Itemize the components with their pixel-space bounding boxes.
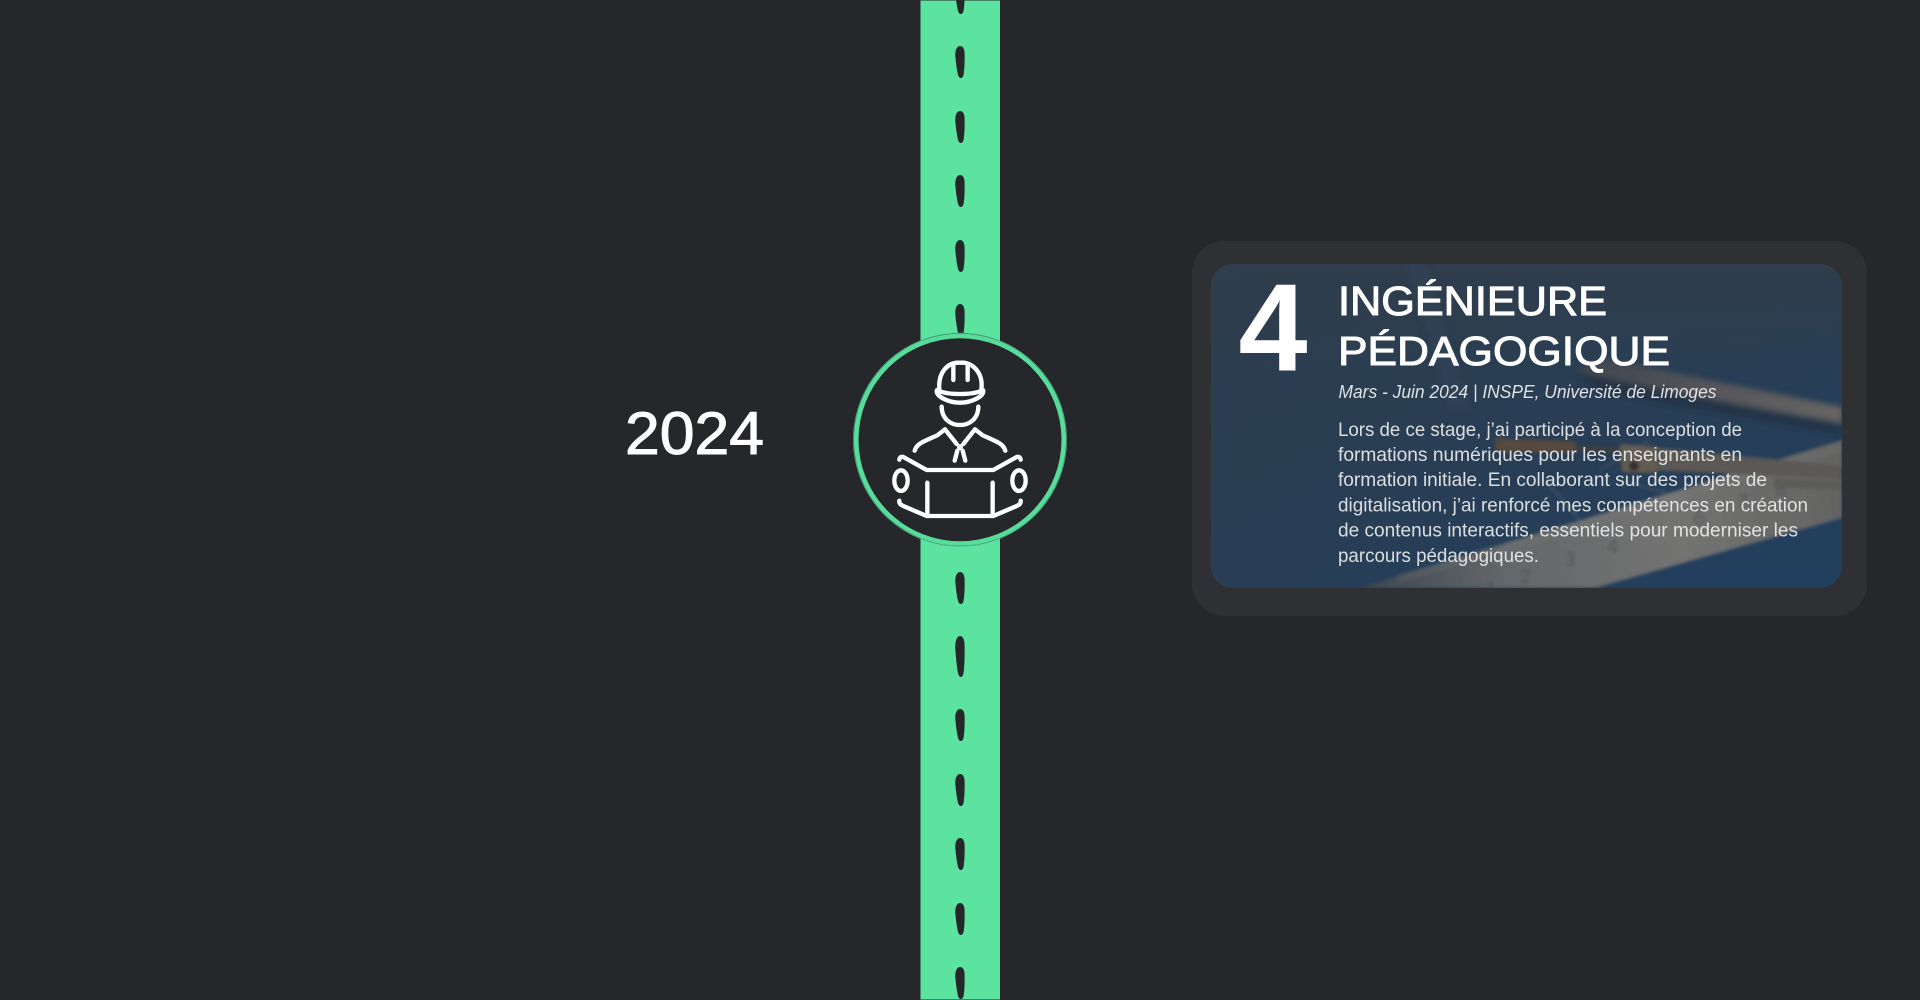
card background photo: compass and ruler: 3 xyxy=(1564,549,1575,571)
description: Lors de ce stage, j’ai participé à la conception de xyxy=(1338,420,1742,441)
heading: INGÉNIEURE xyxy=(1338,278,1607,324)
card background photo: compass and ruler: 1 xyxy=(1486,578,1497,600)
shoulders and collar xyxy=(915,429,1005,461)
card background photo: compass and ruler: 8 xyxy=(1775,479,1786,501)
card background photo: compass and ruler: 4 xyxy=(1607,536,1618,558)
milestone circle xyxy=(853,333,1067,546)
year label: 2024 xyxy=(625,400,764,467)
card background photo: compass and ruler: 6 xyxy=(1694,508,1705,530)
description xyxy=(1338,420,1808,567)
helmet xyxy=(937,363,983,403)
description: parcours pédagogiques. xyxy=(1338,546,1539,567)
hands xyxy=(894,470,1026,491)
card background photo: compass and ruler xyxy=(1211,262,1842,600)
face xyxy=(942,407,978,425)
description: formation initiale. En collaborant sur des projets de xyxy=(1338,470,1767,491)
icon: engineer with helmet reading a plan xyxy=(894,363,1026,516)
heading xyxy=(1338,278,1670,374)
compass arm with brass barrel xyxy=(1495,438,1575,453)
description: digitalisation, j’ai renforcé mes compétences en création xyxy=(1338,496,1808,516)
description: formations numériques pour les enseignants en xyxy=(1338,445,1742,466)
timeline road xyxy=(920,0,1000,1000)
road centre dashes xyxy=(955,0,965,999)
open plan sheet xyxy=(899,457,1021,516)
card background photo: compass and ruler: 7 xyxy=(1737,491,1748,513)
card background photo: compass and ruler: 2 xyxy=(1520,566,1531,588)
description: de contenus interactifs, essentiels pour moderniser les xyxy=(1338,520,1798,542)
heading: PÉDAGOGIQUE xyxy=(1338,328,1670,374)
step number: 4 xyxy=(1238,260,1308,398)
ruler xyxy=(1360,440,1842,588)
date and place: Mars - Juin 2024 | INSPE, Université de Limoges xyxy=(1338,381,1716,402)
timeline infographic xyxy=(628,0,1867,1000)
panel: experience card xyxy=(1192,241,1867,616)
